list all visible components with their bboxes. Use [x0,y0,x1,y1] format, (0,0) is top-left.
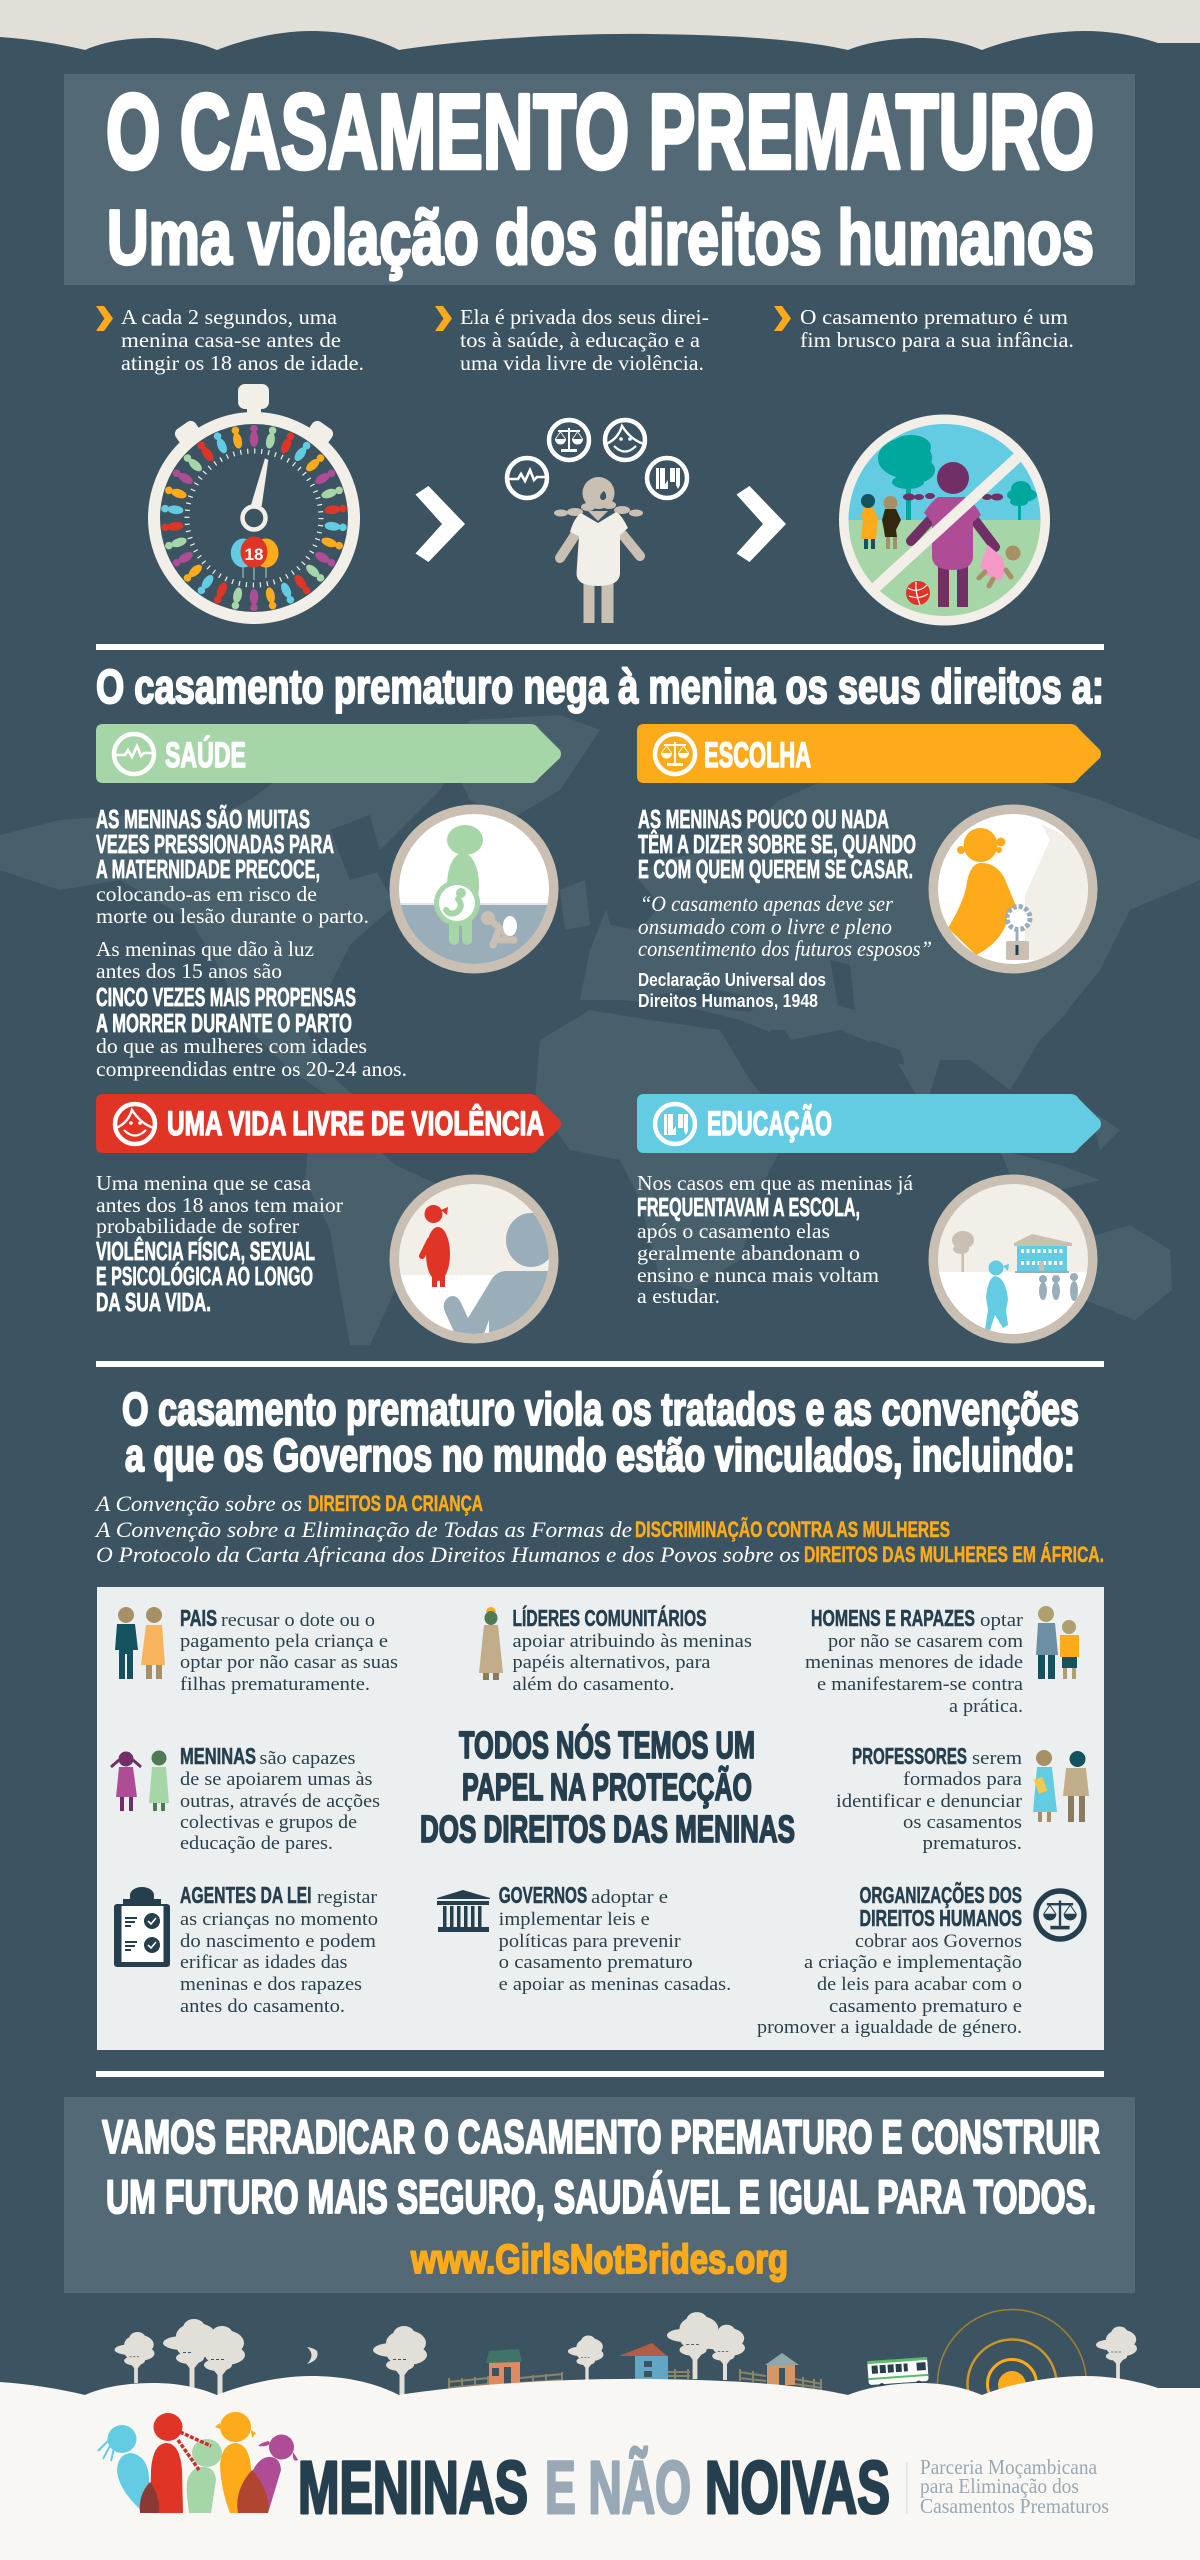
panel heading: TODOS NÓS TEMOS UM [459,1723,755,1767]
arrow 2 [736,486,786,562]
landscape: moon [307,2347,318,2364]
text: agentes: do nascimento e podem [180,1931,376,1952]
text: violência: probabilidade de sofrer [96,1214,299,1238]
text: violência: Uma menina que se casa [96,1171,312,1195]
world map backdrop [0,715,1200,1345]
text: pais: PAIS [180,1605,217,1631]
text: escolha: consentimento dos futuros esposos” [638,936,932,961]
text: agentes [180,1882,378,2017]
intro text 1: atingir os 18 anos de idade. [121,351,364,375]
icon: health pulse [114,734,154,774]
banner: vida livre de violência [96,1094,561,1153]
intro text 3: O casamento prematuro é um [800,305,1068,329]
icon: scales [655,734,695,774]
text: governos: o casamento prematuro [499,1952,693,1973]
text: pais: filhas prematuramente. [180,1674,370,1695]
text: saúde: VEZES PRESSIONADAS PARA [96,831,334,859]
text: professores: identificar e denunciar [836,1791,1023,1812]
treaties list: O Protocolo da Carta Africana dos Direitos Humanos e dos Povos sobre os [96,1542,800,1567]
text: educação: após o casamento elas [637,1219,830,1243]
intro text 2 [435,305,709,375]
text: governos: políticas para prevenir [499,1931,681,1952]
text: organizações: ORGANIZAÇÕES DOS [860,1881,1022,1908]
landscape: fences [448,2369,822,2392]
text: meninas: colectivas e grupos de [180,1812,357,1833]
intro text 2: Ela é privada dos seus direi- [460,305,709,329]
text: agentes: meninas e dos rapazes [180,1974,362,1995]
text: meninas: MENINAS [180,1743,256,1769]
text: escolha: onsumado com o livre e pleno [638,914,892,939]
icon: girl face [115,1104,155,1144]
landscape: house 1 [486,2349,522,2387]
text: governos [499,1882,731,1995]
text: professores: serem [972,1748,1022,1769]
text: educação: geralmente abandonam o [637,1241,860,1265]
icon: clipboard [114,1887,170,1967]
text: saúde: As meninas que dão à luz [96,937,314,961]
text: meninas: são capazes [260,1748,356,1769]
logo wordmark: E NÃO [545,2446,691,2529]
text: pais: pagamento pela criança e [180,1631,388,1652]
landscape: bus [867,2357,929,2390]
call to action panel [64,2097,1135,2293]
landscape: house 2 [619,2343,668,2380]
text: líderes [512,1604,752,1695]
text: escolha [638,806,932,1011]
logo wordmark: MENINAS [298,2446,528,2529]
partnership tagline: Parceria Moçambicana [920,2455,1098,2479]
text: agentes: as crianças no momento [180,1909,378,1930]
text: governos: implementar leis e [499,1909,650,1930]
text: educação: Nos casos em que as meninas já [637,1171,914,1195]
circle: girl and adult [390,1174,560,1345]
text: homens: por não se casarem com [828,1631,1023,1652]
text: organizações: cobrar aos Governos [855,1931,1022,1952]
banner: educação: EDUCAÇÃO [707,1105,832,1143]
stopwatch with children [154,384,354,618]
text: violência: DA SUA VIDA. [96,1289,211,1317]
text: saúde [96,804,407,1081]
text: saúde: CINCO VEZES MAIS PROPENSAS [96,984,356,1012]
text: educação: ensino e nunca mais voltam [637,1263,879,1287]
banner: vida livre de violência: UMA VIDA LIVRE DE VIOLÊNCIA [167,1105,544,1143]
prohibited childhood illustration [839,414,1050,630]
divider [96,1361,1104,1367]
footer ground [0,2376,1200,2560]
icon: teachers [1033,1750,1089,1822]
text: violência: VIOLÊNCIA FÍSICA, SEXUAL [96,1236,315,1266]
top landscape edge [0,0,1200,50]
text: homens: meninas menores de idade [805,1652,1023,1673]
text: líderes: LÍDERES COMUNITÁRIOS [512,1604,706,1631]
text: escolha: TÊM A DIZER SOBRE SE, QUANDO [638,829,916,859]
text: organizações: promover a igualdade de género. [757,2017,1022,2038]
text: saúde: colocando-as em risco de [96,882,317,906]
text: escolha: AS MENINAS POUCO OU NADA [638,806,889,834]
text: homens: a prática. [949,1696,1023,1717]
arrow 1 [416,486,465,562]
text: professores: formados para [903,1769,1023,1790]
icon: books [655,1104,695,1144]
title panel [64,73,1135,285]
text: educação: a estudar. [637,1284,720,1308]
text: líderes: papéis alternativos, para [512,1652,711,1673]
panel heading: DOS DIREITOS DAS MENINAS [420,1809,795,1851]
text: homens: e manifestarem-se contra [817,1674,1024,1695]
landscape: trees [115,2312,1137,2395]
icon: man and boy [1036,1606,1079,1679]
treaties list: A Convenção sobre os [94,1491,302,1516]
text: homens: HOMENS E RAPAZES [811,1605,975,1631]
girl deprived of rights with icons [507,420,687,623]
text: violência: E PSICOLÓGICA AO LONGO [96,1261,313,1291]
text: agentes: AGENTES DA LEI [180,1882,312,1908]
partnership tagline [920,2455,1109,2518]
text: homens: optar [980,1610,1024,1631]
icon: two girls [111,1750,169,1811]
text: violência [96,1171,343,1317]
text: professores: prematuros. [922,1833,1022,1854]
panel: roles [97,1587,1104,2050]
text: pais: optar por não casar as suas [180,1652,398,1673]
treaties list: A Convenção sobre a Eliminação de Todas as Formas de [94,1517,632,1542]
icon: government building [437,1890,490,1932]
text: organizações: casamento prematuro e [829,1996,1022,2017]
text: organizações [757,1881,1022,2038]
text: organizações: DIREITOS HUMANOS [860,1905,1022,1931]
circle: girl leaving school [928,1174,1100,1344]
text: meninas [180,1743,380,1854]
text: saúde: A MORRER DURANTE O PARTO [96,1010,352,1038]
text: organizações: a criação e implementação [804,1952,1022,1973]
intro text 3: fim brusco para a sua infância. [800,328,1074,352]
text: violência: antes dos 18 anos tem maior [96,1193,343,1217]
banner: escolha [637,724,1101,783]
text: agentes: erificar as idades das [180,1952,348,1973]
text: agentes: registar [317,1887,378,1908]
text: governos: GOVERNOS [499,1882,587,1908]
treaties heading [122,1383,1079,1481]
circle: girl at locked door [928,804,1098,974]
panel heading: PAPEL NA PROTECÇÃO [462,1765,752,1809]
text: líderes: além do casamento. [512,1674,674,1695]
icon: human rights scales [1036,1891,1084,1939]
text: saúde: do que as mulheres com idades [96,1034,367,1058]
intro text 2: uma vida livre de violência. [460,351,704,375]
banner: escolha: ESCOLHA [704,736,811,775]
icon: parents [115,1607,165,1679]
text: professores: os casamentos [903,1812,1022,1833]
logo separator [906,2462,908,2514]
banner: saúde: SAÚDE [165,735,246,775]
intro text 3 [774,305,1074,352]
treaties list: DIREITOS DA CRIANÇA [308,1491,483,1516]
divider [96,2071,1104,2077]
text: agentes: antes do casamento. [180,1996,345,2017]
text: pais: recusar o dote ou o [221,1610,375,1631]
landscape: house 3 [765,2353,799,2385]
divider [96,644,1104,650]
text: educação [637,1171,914,1308]
banner: saúde [96,724,561,783]
text: homens [805,1605,1024,1717]
text: pais [180,1605,398,1695]
text: meninas: outras, através de acções [180,1791,380,1812]
text: professores: PROFESSORES [852,1743,967,1769]
text: escolha: Declaração Universal dos [638,970,826,990]
panel heading [420,1723,795,1851]
banner: educação [637,1094,1101,1153]
logo wordmark: NOIVAS [705,2446,890,2529]
text: saúde: compreendidas entre os 20-24 anos. [96,1057,407,1081]
icon: community leader [479,1607,503,1680]
logo people [98,2412,298,2513]
text: saúde: morte ou lesão durante o parto. [96,904,369,928]
intro text 1: A cada 2 segundos, uma [121,305,338,329]
text: escolha: Direitos Humanos, 1948 [638,991,818,1011]
website: www.GirlsNotBrides.org [410,2236,788,2282]
intro text 1: menina casa-se antes de [121,328,341,352]
landscape: sun [938,2310,1086,2458]
logo wordmark [298,2446,890,2529]
text: governos: adoptar e [591,1887,668,1908]
text: saúde: AS MENINAS SÃO MUITAS [96,804,310,834]
text: saúde: A MATERNIDADE PRECOCE, [96,856,320,884]
text: meninas: educação de pares. [180,1833,333,1854]
treaties list: DISCRIMINAÇÃO CONTRA AS MULHERES [635,1517,950,1542]
partnership tagline: Casamentos Prematuros [920,2494,1109,2518]
stopwatch with children: 18 [245,545,263,564]
intro text 2: tos à saúde, à educação e a [460,328,701,352]
partnership tagline: para Eliminação dos [920,2474,1079,2498]
treaties list [94,1491,1104,1567]
intro text 1 [96,305,364,375]
text: organizações: de leis para acabar com o [817,1974,1022,1995]
text: escolha: E COM QUEM QUEREM SE CASAR. [638,856,913,884]
text: saúde: antes dos 15 anos são [96,959,282,983]
circle: pregnant girl [390,804,560,984]
text: escolha: “O casamento apenas deve ser [640,891,893,916]
text: líderes: apoiar atribuindo às meninas [512,1631,752,1652]
text: governos: e apoiar as meninas casadas. [499,1974,731,1995]
text: educação: FREQUENTAVAM A ESCOLA, [637,1194,860,1222]
text: professores [836,1743,1023,1854]
text: meninas: de se apoiarem umas às [180,1769,372,1790]
